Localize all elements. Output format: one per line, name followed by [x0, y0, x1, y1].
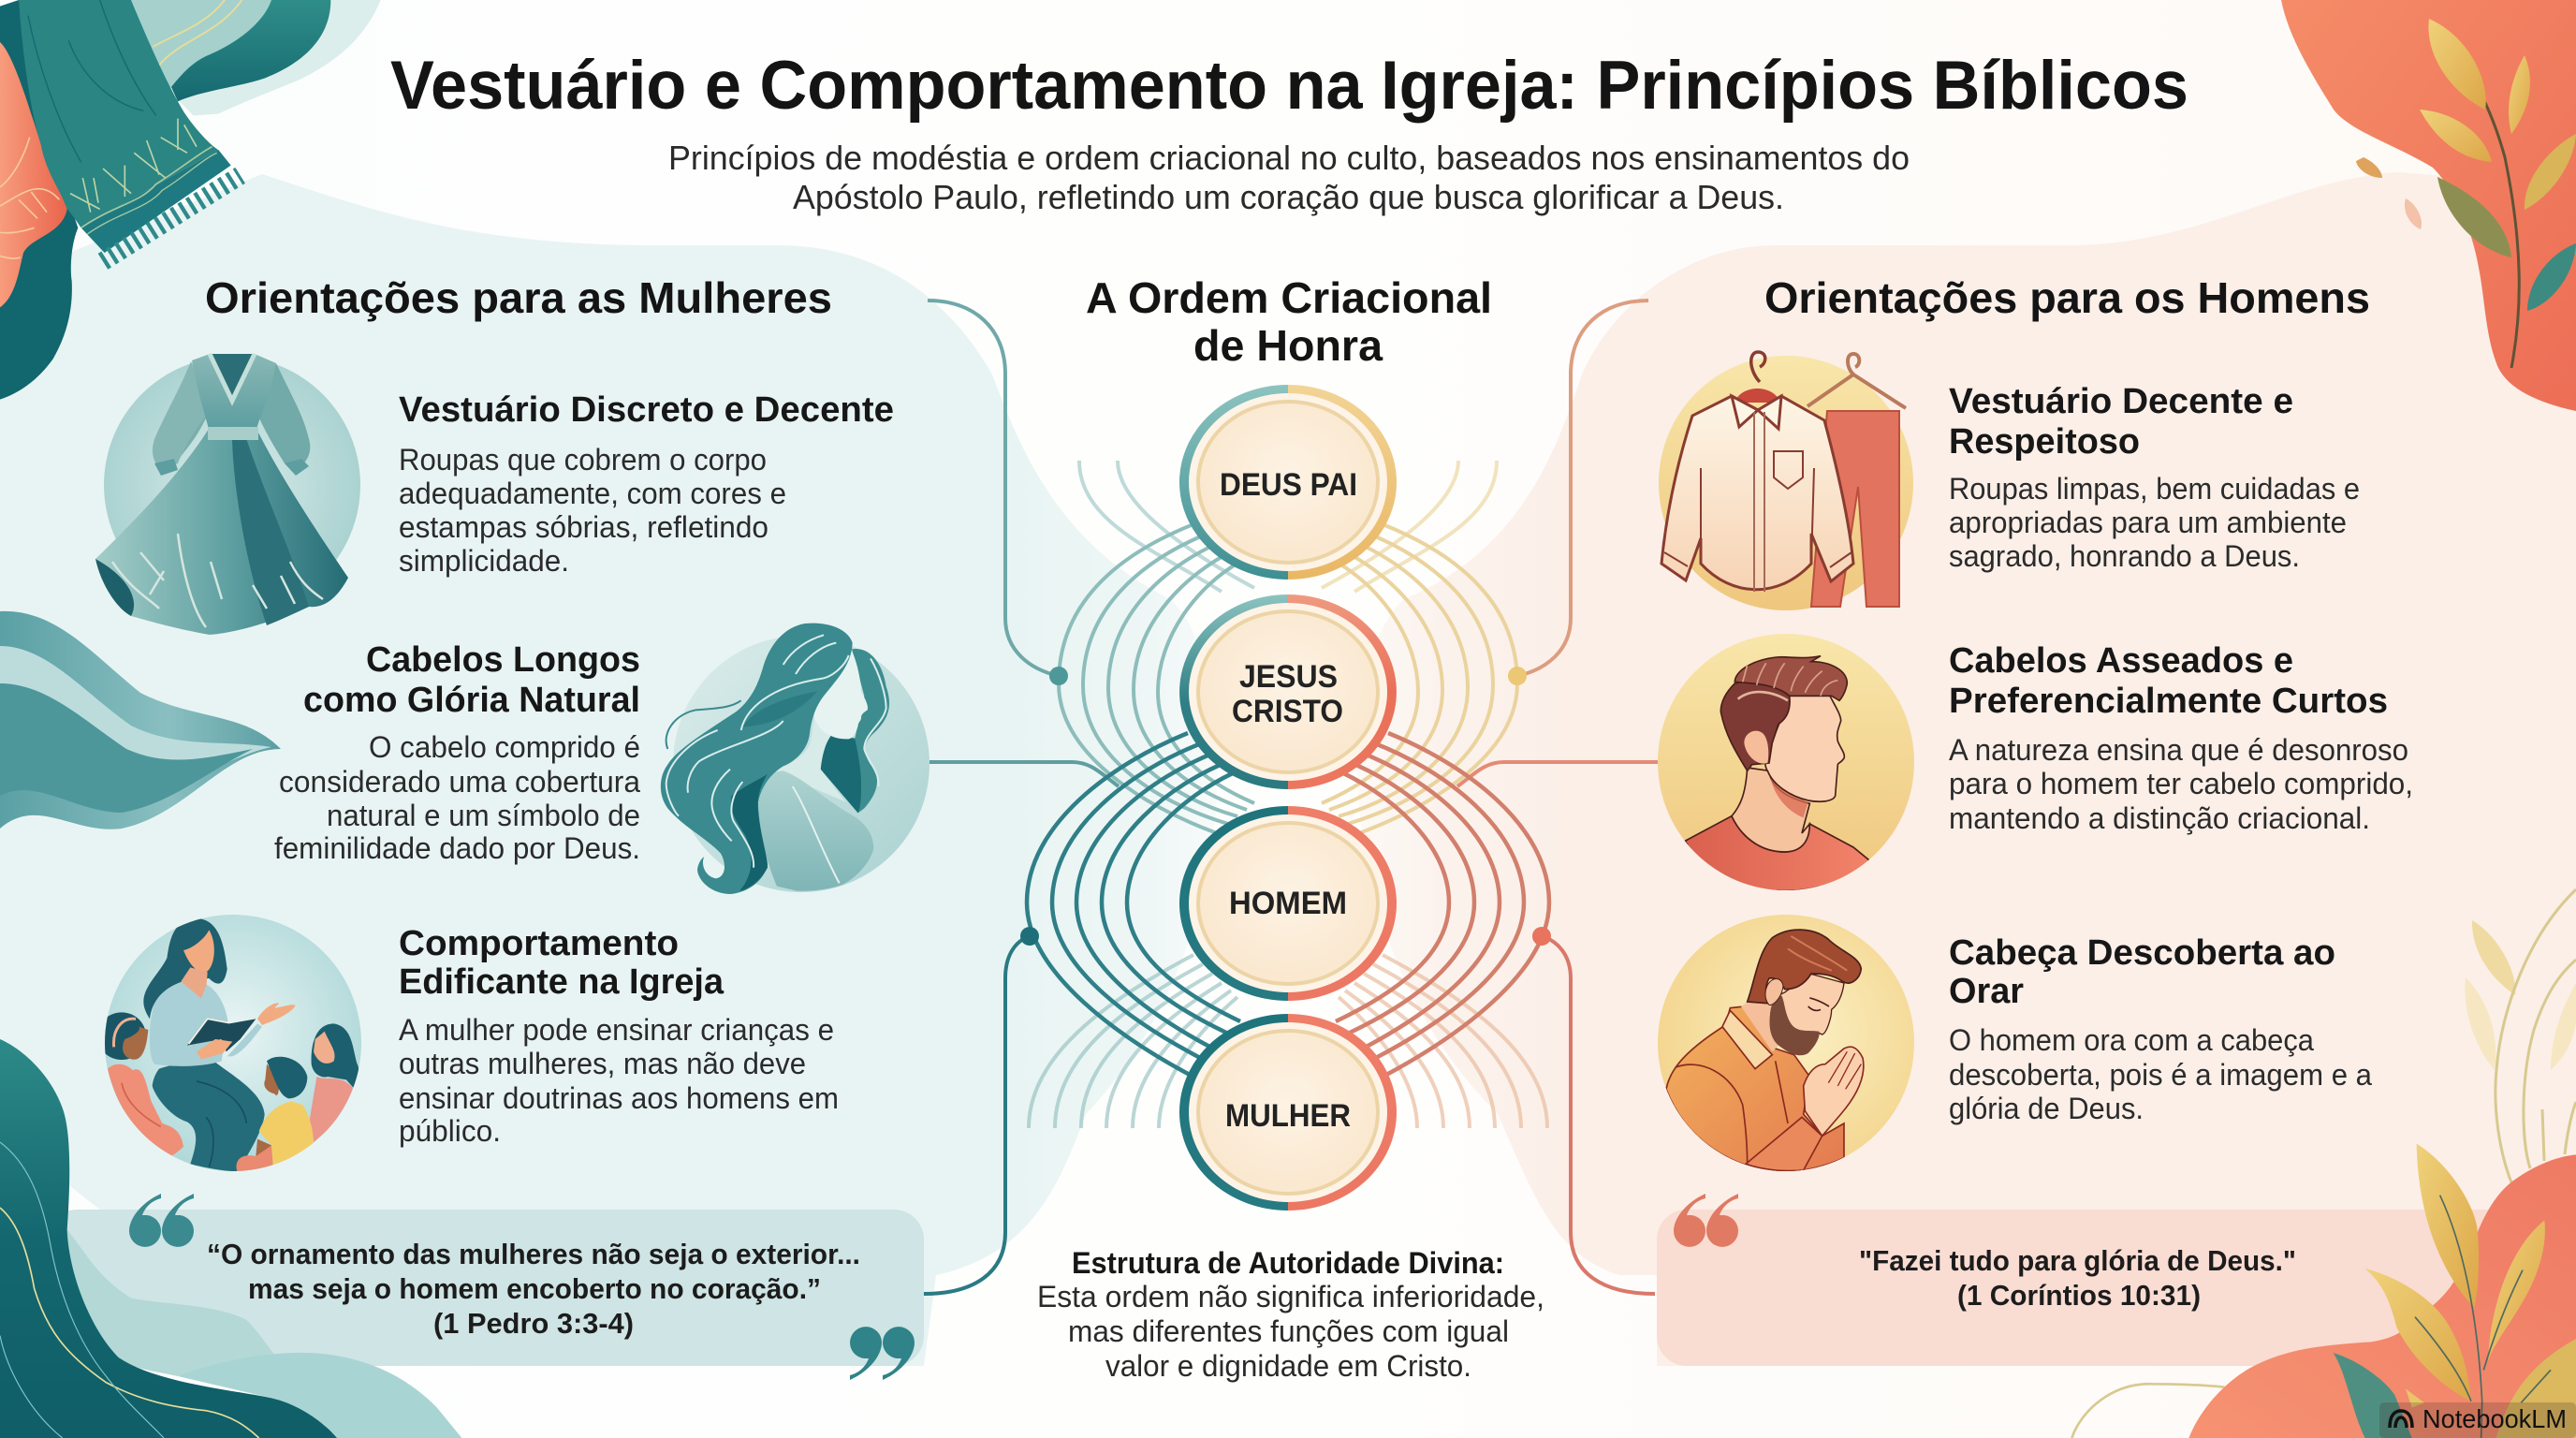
heading: center: de Honra: [1193, 321, 1383, 370]
text block: center note: mas diferentes funções com igual: [1068, 1314, 1509, 1348]
icon: man with short hair: [1658, 634, 1914, 891]
text block: Vestuário Discreto: Roupas que cobrem o corpo: [399, 443, 767, 477]
text block: Cabelos Asseados: Cabelos Asseados e: [1949, 641, 2293, 681]
text block: center note: Esta ordem não significa inferioridade,: [1037, 1280, 1544, 1313]
text block: center note: [1037, 1246, 1544, 1383]
text block: Comportamento: público.: [399, 1114, 501, 1148]
chart: woven lines right: [1322, 461, 1549, 1128]
text block: Comportamento: [399, 924, 839, 1148]
decoration: left wave: [0, 611, 281, 829]
connector: men top: [1517, 301, 1648, 676]
node: Deus Pai: DEUS PAI: [1220, 467, 1357, 503]
quote text: men: "Fazei tudo para glória de Deus.": [1859, 1244, 2296, 1277]
connector dots: [1020, 667, 1551, 946]
text block: Comportamento: ensinar doutrinas aos homens em: [399, 1081, 839, 1115]
text block: Vestuário Discreto: adequadamente, com cores e: [399, 477, 786, 510]
icon: open quote teal: [129, 1194, 194, 1247]
text block: Vestuário Decente: Vestuário Decente e: [1949, 382, 2293, 421]
decoration: right gold stems: [2465, 889, 2576, 1182]
text block: Cabeça Descoberta: [1949, 933, 2372, 1125]
heading: center: [1086, 273, 1492, 370]
text block: Vestuário Decente: sagrado, honrando a Deus.: [1949, 539, 2300, 573]
node: Deus Pai: [1179, 385, 1397, 580]
text block: Cabeça Descoberta: O homem ora com a cabeça: [1949, 1023, 2314, 1057]
text block: Cabelos Longos: considerado uma cobertura: [279, 765, 640, 799]
text block: Vestuário Decente: Roupas limpas, bem cuidadas e: [1949, 472, 2360, 506]
panel: men background: [1357, 172, 2576, 1366]
text block: Cabelos Asseados: [1949, 641, 2413, 835]
icon: NotebookLM logo: [2390, 1411, 2412, 1428]
heading: men: Orientações para os Homens: [1764, 273, 2370, 322]
node: Jesus Cristo: JESUS: [1239, 659, 1338, 695]
icon: woman with long hair: [661, 624, 929, 894]
text block: Vestuário Decente: [1949, 382, 2360, 573]
title: Vestuário e Comportamento na Igreja: Princípios Bíblicos: [390, 48, 2188, 124]
text block: Vestuário Decente: Respeitoso: [1949, 422, 2140, 462]
decoration: top right coral blob and plant: [2281, 0, 2576, 411]
node: Jesus Cristo: [1179, 594, 1397, 789]
text block: Comportamento: A mulher pode ensinar crianças e: [399, 1013, 834, 1047]
icon: man praying: [1658, 915, 1914, 1172]
text block: Cabelos Longos: [274, 640, 640, 865]
text block: Vestuário Discreto: [399, 390, 894, 578]
icon: shirt and pants: [1659, 352, 1913, 610]
decoration: bottom right coral blob and leaves: [2071, 1144, 2576, 1438]
text block: center note: valor e dignidade em Cristo.: [1105, 1349, 1471, 1383]
subtitle: Princípios de modéstia e ordem criacional no culto, baseados nos ensinamentos do: [668, 139, 1910, 177]
text block: Cabelos Asseados: Preferencialmente Curtos: [1949, 682, 2388, 721]
decoration: top left scarf: [0, 0, 381, 400]
text block: Cabelos Longos: feminilidade dado por Deus.: [274, 831, 640, 865]
badge: NotebookLM: [2379, 1402, 2576, 1438]
connector: men middle: [1457, 762, 1658, 786]
node: Mulher: MULHER: [1225, 1098, 1351, 1134]
quote text: men: [1859, 1244, 2296, 1312]
text block: Cabeça Descoberta: glória de Deus.: [1949, 1092, 2144, 1125]
heading: center: A Ordem Criacional: [1086, 273, 1492, 322]
badge: NotebookLM: NotebookLM: [2422, 1404, 2567, 1433]
quote text: women: “O ornamento das mulheres não seja o exterior...: [207, 1238, 860, 1270]
text block: Cabelos Asseados: para o homem ter cabelo comprido,: [1949, 767, 2413, 800]
heading: women: Orientações para as Mulheres: [205, 273, 832, 322]
panel: women background: [0, 174, 1218, 1366]
text block: Vestuário Discreto: Vestuário Discreto e Decente: [399, 390, 894, 430]
text block: Vestuário Decente: apropriadas para um ambiente: [1949, 506, 2347, 539]
icon: dress: [95, 354, 360, 635]
connector: women top: [928, 301, 1059, 676]
text block: Cabelos Longos: como Glória Natural: [303, 681, 640, 720]
text block: Cabelos Longos: O cabelo comprido é: [369, 730, 640, 764]
text block: Cabeça Descoberta: Orar: [1949, 972, 2024, 1011]
node: Homem: [1179, 806, 1397, 1001]
node: Homem: HOMEM: [1229, 886, 1347, 921]
text block: Comportamento: Edificante na Igreja: [399, 962, 724, 1002]
text block: center note: Estrutura de Autoridade Divina:: [1072, 1246, 1504, 1280]
quote text: women: [207, 1238, 860, 1340]
quote panel: men: [1657, 1210, 2574, 1366]
connector: men bottom: [1542, 936, 1655, 1294]
chart: woven lines left: [1027, 461, 1254, 1128]
icon: teacher with children: [97, 915, 361, 1172]
node: Mulher: [1179, 1014, 1397, 1211]
node: Jesus Cristo: CRISTO: [1232, 694, 1343, 729]
icon: open quote coral: [1674, 1194, 1738, 1247]
subtitle: [668, 139, 1910, 216]
quote text: women: mas seja o homem encoberto no coração.”: [248, 1272, 821, 1305]
quote text: men: (1 Coríntios 10:31): [1957, 1279, 2201, 1312]
decoration: bottom left blob: [0, 1039, 461, 1438]
text block: Vestuário Discreto: simplicidade.: [399, 544, 569, 578]
icon: close quote teal: [850, 1327, 915, 1380]
text block: Cabelos Longos: natural e um símbolo de: [327, 799, 640, 832]
text block: Cabelos Asseados: mantendo a distinção criacional.: [1949, 801, 2370, 835]
text block: Cabeça Descoberta: Cabeça Descoberta ao: [1949, 933, 2335, 973]
subtitle: Apóstolo Paulo, refletindo um coração que busca glorificar a Deus.: [793, 178, 1784, 216]
text block: Cabeça Descoberta: descoberta, pois é a imagem e a: [1949, 1058, 2372, 1092]
text block: Comportamento: Comportamento: [399, 924, 679, 963]
text block: Vestuário Discreto: estampas sóbrias, refletindo: [399, 510, 768, 544]
connector: women bottom: [924, 936, 1030, 1294]
quote panel: women: [47, 1210, 924, 1366]
text block: Cabelos Longos: Cabelos Longos: [366, 640, 640, 680]
text block: Cabelos Asseados: A natureza ensina que é desonroso: [1949, 733, 2408, 767]
text block: Comportamento: outras mulheres, mas não deve: [399, 1047, 806, 1080]
quote text: women: (1 Pedro 3:3-4): [433, 1307, 634, 1340]
connector: women middle: [929, 762, 1119, 786]
